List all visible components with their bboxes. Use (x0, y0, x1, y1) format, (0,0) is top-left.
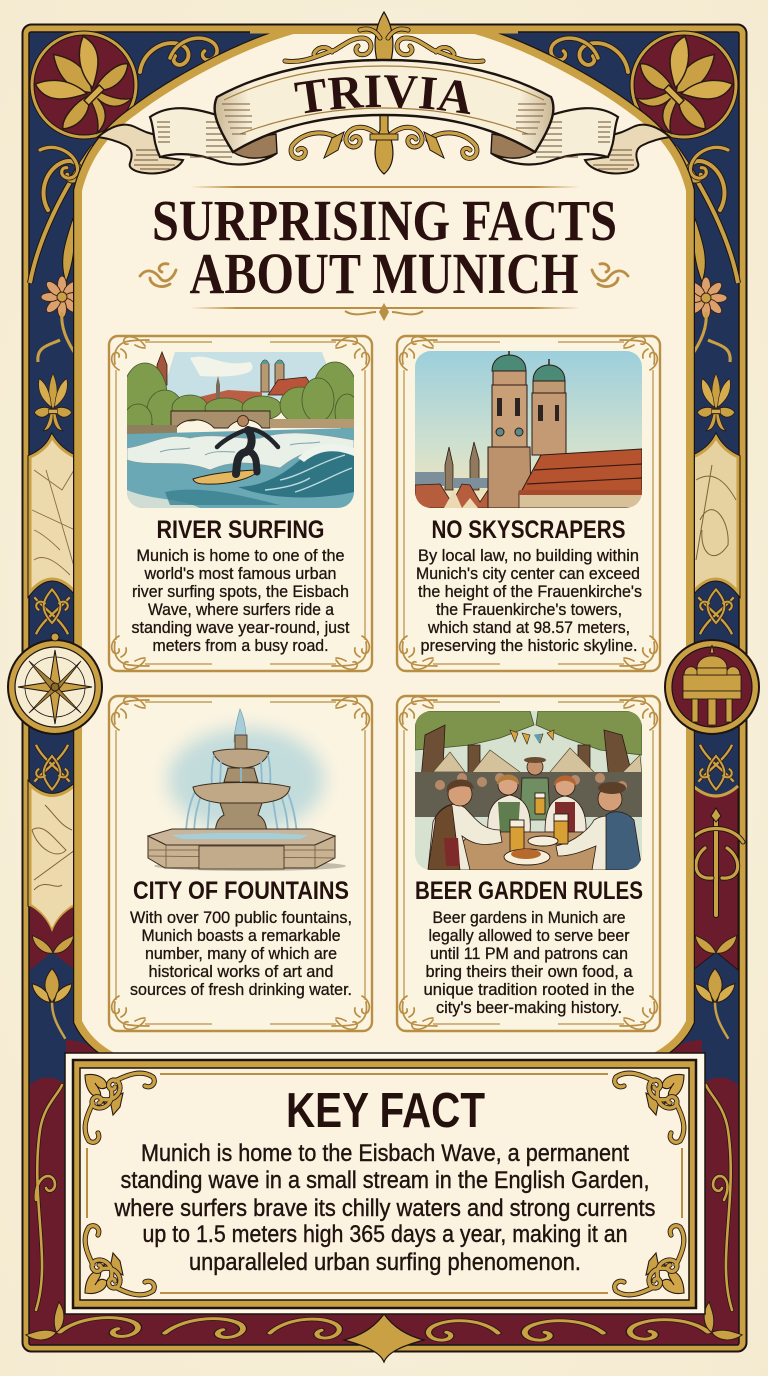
card title: BEER GARDEN RULES (415, 877, 643, 905)
card title: NO SKYSCRAPERS (432, 516, 626, 544)
illustration: beer garden scene (415, 711, 642, 870)
heading line 2: ABOUT MUNICH (190, 241, 578, 306)
compass medallion (8, 633, 102, 734)
card text: Munich boasts a remarkable (142, 927, 340, 945)
right swirl (592, 264, 628, 286)
surfer (217, 429, 278, 474)
ribbon main band (215, 60, 553, 152)
illustration: tiered fountain (148, 709, 346, 871)
card: river surfing (109, 336, 372, 671)
key fact text: Munich is home to the Eisbach Wave, a permanent (141, 1140, 629, 1167)
left lower map panel (30, 785, 75, 932)
lower right scroll (388, 127, 477, 158)
card text: river surfing spots, the Eisbach (132, 583, 349, 601)
illustration: surfer on river wave (123, 351, 359, 508)
right band: flower and fleur (675, 147, 738, 431)
key fact panel (65, 1053, 705, 1314)
distant buildings (157, 352, 167, 385)
left swirl (140, 264, 176, 286)
key fact text: unparalleled urban surfing phenomenon. (189, 1249, 581, 1276)
upper left scroll (285, 29, 380, 62)
beer mugs (510, 793, 568, 852)
key fact heading: KEY FACT (286, 1084, 485, 1138)
bottom border scrollwork (26, 1085, 742, 1362)
icon: sword and crossbow emblem (690, 808, 743, 915)
key fact text: where surfers brave its chilly waters and strong currents (114, 1195, 655, 1222)
card text: the Frauenkirche's towers, (436, 601, 622, 619)
card text: number, many of which are (145, 945, 337, 963)
card text: until 11 PM and patrons can (430, 945, 628, 963)
central fleur ornament behind banner (285, 12, 483, 174)
seated women (488, 795, 530, 832)
card title: RIVER SURFING (156, 516, 324, 544)
left upper map panel (30, 437, 75, 592)
corner ornaments (85, 1073, 684, 1295)
south tower (532, 393, 566, 455)
upper right scroll (388, 29, 483, 62)
card text: By local law, no building within (418, 547, 639, 565)
card text: Munich is home to one of the (136, 547, 344, 565)
white water (127, 433, 354, 470)
trivia ribbon banner (96, 11, 672, 175)
card text: standing wave year-round, just (132, 619, 350, 637)
card title: CITY OF FOUNTAINS (133, 877, 349, 905)
card text: sources of fresh drinking water. (130, 981, 352, 999)
breaking wave (238, 451, 354, 498)
left maroon leaf section (30, 906, 75, 1039)
stone bridge (171, 411, 270, 428)
left band: flower and fleur (30, 147, 93, 431)
surfboard (193, 470, 260, 484)
card: no skyscrapers (397, 336, 660, 671)
card text: Munich's city center can exceed (416, 565, 640, 583)
card text: the height of the Frauenkirche's (418, 583, 642, 601)
heading line 1: SURPRISING FACTS (152, 188, 617, 253)
heading: Trivia: TRIVIA (294, 75, 470, 114)
icon: domed palace (683, 645, 741, 725)
trees (127, 362, 354, 428)
small divider ornament (345, 303, 423, 321)
old town houses (415, 484, 490, 508)
right upper map panel (693, 437, 738, 592)
river water (127, 428, 354, 508)
maroon lower border field (30, 1040, 738, 1344)
card: city of fountains (109, 696, 372, 1031)
background crowd (415, 772, 642, 817)
card text: With over 700 public fountains, (130, 909, 352, 927)
food plates (504, 849, 550, 865)
fountain jet (234, 709, 246, 742)
basin water and base (148, 829, 335, 845)
card text: bring theirs their own food, a (426, 963, 633, 981)
card text: preserving the historic skyline. (420, 637, 638, 655)
left man (428, 804, 502, 870)
card text: unique tradition rooted in the (424, 981, 634, 999)
lower left scroll (291, 127, 380, 158)
card text: city's beer-making history. (436, 999, 622, 1017)
ribbon right tail (491, 108, 670, 173)
card text: historical works of art and (148, 963, 334, 981)
card text: Beer gardens in Munich are (432, 909, 626, 927)
top tier (235, 735, 247, 749)
cathedral red roof (521, 449, 642, 492)
card: beer garden rules (397, 696, 660, 1031)
north tower (492, 385, 527, 447)
illustration: Frauenkirche towers (415, 349, 642, 508)
card text: legally allowed to serve beer (428, 927, 630, 945)
card text: meters from a busy road. (152, 637, 328, 655)
right maroon emblem section (690, 786, 743, 1039)
umbrellas (432, 748, 642, 772)
top-left corner medallion (21, 22, 219, 216)
distant spires (445, 442, 479, 490)
title block (140, 186, 628, 321)
palace medallion (665, 640, 759, 734)
main cream arched panel (77, 29, 691, 1058)
middle tier (193, 782, 290, 803)
bunting (510, 730, 554, 744)
right man (556, 816, 632, 870)
card text: world's most famous urban (144, 565, 336, 583)
card text: which stand at 98.57 meters, (427, 619, 630, 637)
ribbon left tail (98, 108, 277, 173)
knot ornaments (34, 589, 734, 790)
card text: Wave, where surfers ride a (148, 601, 335, 619)
table (464, 832, 596, 870)
key fact text: up to 1.5 meters high 365 days a year, making it an (142, 1221, 628, 1248)
tree canopy (415, 711, 642, 755)
waiter in green (520, 778, 550, 820)
key fact text: standing wave in a small stream in the English Garden, (120, 1167, 650, 1194)
water streams (186, 755, 297, 840)
top border overlay (250, 25, 518, 34)
top-right corner medallion (549, 22, 747, 216)
